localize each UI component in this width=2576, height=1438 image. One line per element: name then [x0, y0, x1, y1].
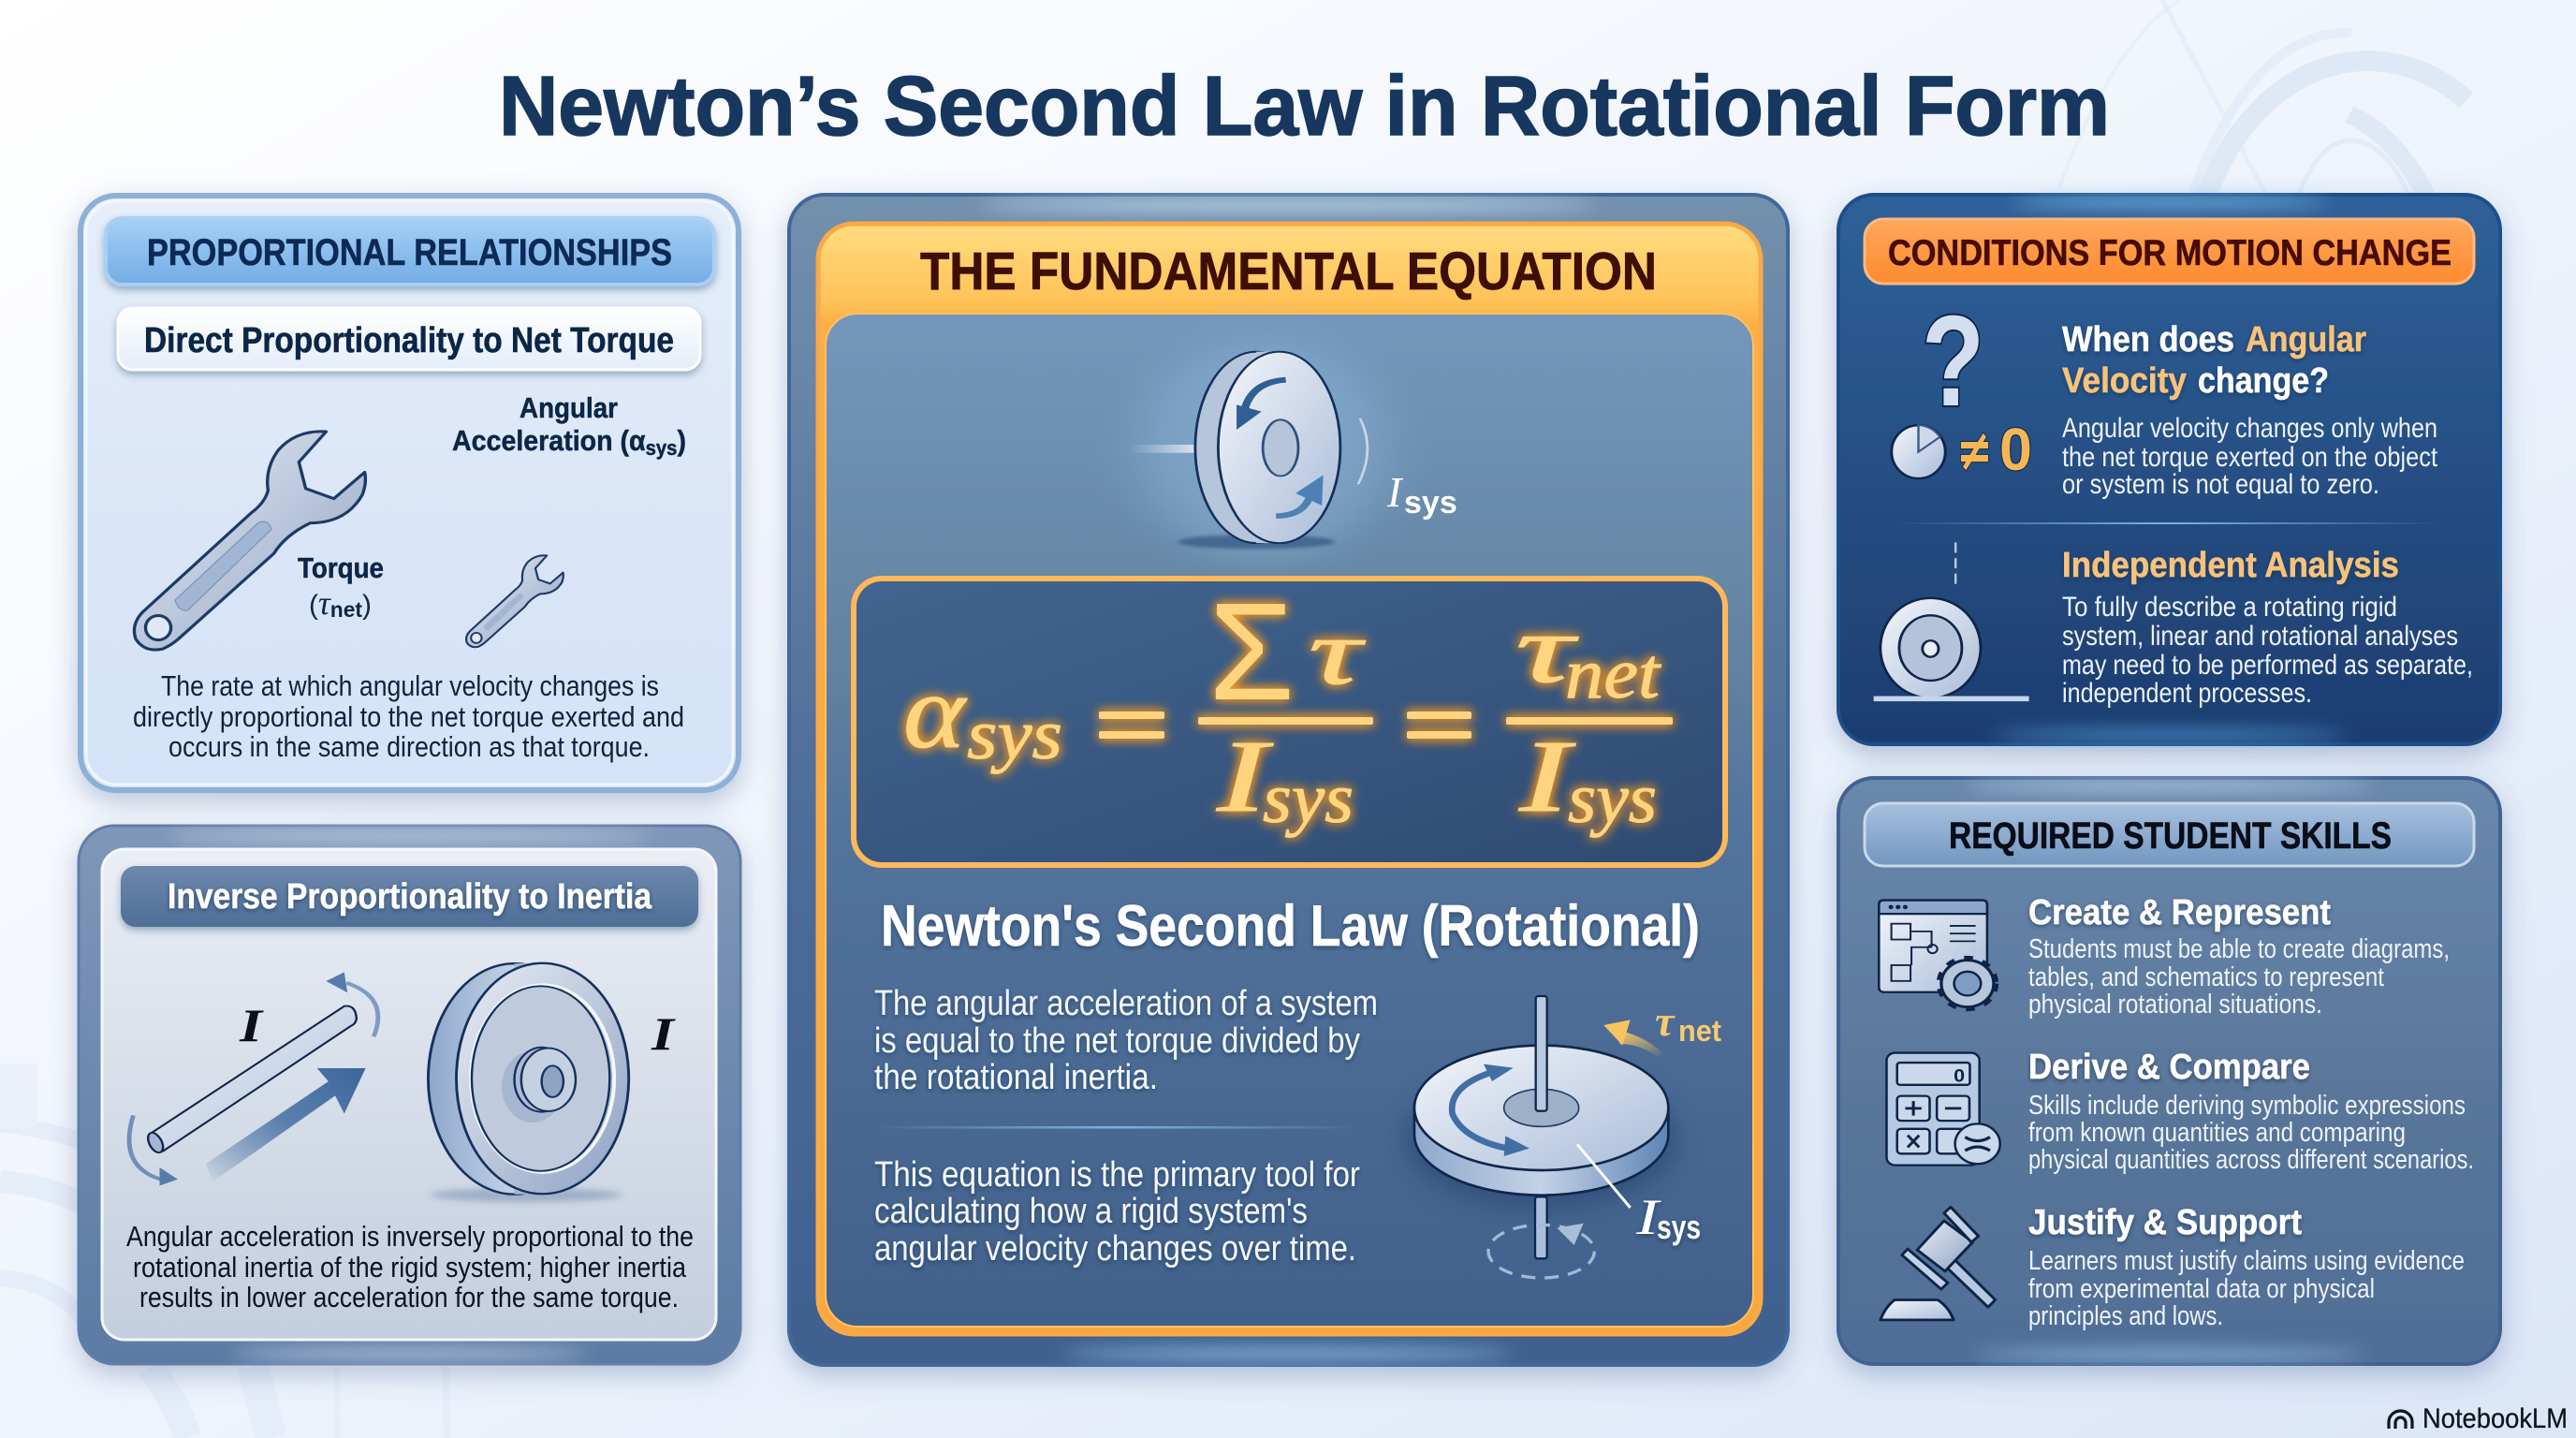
label: angular acceleration [452, 391, 686, 460]
text: justify and support: principles and lows. [2028, 1301, 2223, 1331]
text: definition: the rotational inertia. [874, 1058, 1158, 1097]
heading: when does angular velocity change: Angular [2246, 320, 2366, 360]
label: angular acceleration: Acceleration (α [452, 424, 662, 457]
heading: when does angular velocity change: When does [2062, 320, 2234, 360]
text: direct proportionality description: occurs in the same direction as that torque. [168, 730, 650, 763]
label: inertia of disc: I [651, 1007, 676, 1060]
text: definition: is equal to the net torque divided by [874, 1021, 1360, 1061]
icon: rod with rotation arrows [129, 972, 378, 1185]
text: application: calculating how a rigid system's [874, 1192, 1308, 1231]
text: justify and support [2028, 1246, 2465, 1331]
icon: spinning disc [1128, 341, 1387, 559]
label: angular acceleration: ) [677, 424, 686, 457]
panel: required student skills [1838, 778, 2500, 1364]
text: direct proportionality description: directly proportional to the net torque exerted and [133, 700, 684, 733]
label: angular acceleration: Angular [520, 391, 618, 424]
text: angular velocity condition: or system is not equal to zero. [2062, 469, 2379, 500]
text: inverse proportionality description: results in lower acceleration for the same torque. [139, 1281, 679, 1313]
formula: I [1216, 719, 1273, 833]
heading: independent analysis: Independent Analysis [2062, 546, 2399, 585]
label: tau net: τ [1655, 997, 1676, 1045]
label: torque [298, 551, 384, 622]
title: Newton’s Second Law in Rotational Form [499, 60, 2110, 154]
text: derive and compare [2028, 1091, 2474, 1175]
label: torque: ) [362, 590, 372, 621]
icon: net torque not equal zero [1892, 416, 2032, 484]
panel: proportional relationships [80, 196, 739, 790]
label: I sys: sys [1657, 1208, 1701, 1246]
formula [903, 575, 1673, 838]
text: angular velocity condition: the net torque exerted on the object [2062, 442, 2438, 473]
formula: τ [1309, 600, 1366, 704]
text: direct proportionality description: The rate at which angular velocity changes is [161, 669, 659, 702]
text: create and represent: Students must be able to create diagrams, [2028, 934, 2450, 964]
label: tau net: net [1678, 1014, 1721, 1048]
text: create and represent: physical rotational situations. [2028, 990, 2322, 1020]
icon: diagram window and gear [1879, 901, 1996, 1008]
heading: conditions [1865, 219, 2474, 284]
heading: inverse proportionality: Inverse Proportionality to Inertia [168, 877, 652, 917]
diagram: rotating disc on axle [1404, 996, 1678, 1278]
text: application: angular velocity changes over time. [874, 1229, 1356, 1269]
formula: Σ [1208, 575, 1295, 729]
text: derive and compare: Skills include deriving symbolic expressions [2028, 1091, 2466, 1121]
icon: question mark: ? [1922, 289, 1984, 433]
text: inverse proportionality description: rotational inertia of the rigid system; higher inertia [133, 1251, 687, 1284]
icon: net torque not equal zero: 0 [1999, 416, 2032, 483]
icon: rolling wheel [1874, 542, 2029, 701]
equation box [854, 575, 1725, 865]
label: inertia of rod: I [239, 999, 264, 1051]
label: I sys over disc: I [1386, 468, 1404, 516]
heading: proportional relationships [106, 218, 714, 285]
label: torque: net [330, 597, 362, 622]
heading: conditions: CONDITIONS FOR MOTION CHANGE [1888, 233, 2452, 273]
heading: create and represent: Create & Represent [2028, 893, 2331, 932]
text: derive and compare: physical quantities across different scenarios. [2028, 1145, 2474, 1175]
text: independent analysis: may need to be performed as separate, [2062, 650, 2473, 681]
icon: net torque not equal zero: ≠ [1956, 416, 1993, 484]
heading: when does angular velocity change: change? [2198, 361, 2329, 401]
icon: calculator: 0 [1954, 1067, 1965, 1086]
text: application: This equation is the primary tool for [874, 1155, 1360, 1195]
text: definition [874, 984, 1378, 1097]
formula: net [1565, 635, 1661, 713]
text: angular velocity condition: Angular velocity changes only when [2062, 413, 2437, 444]
heading: inverse proportionality [121, 866, 698, 927]
text: inverse proportionality description: Angular acceleration is inversely proportional to the [126, 1220, 694, 1253]
heading: newton's second law: Newton's Second Law (Rotational) [881, 894, 1700, 959]
label: I sys [1635, 1189, 1701, 1246]
formula: α [903, 654, 967, 770]
text: independent analysis [2062, 592, 2473, 709]
label: I sys over disc: sys [1404, 485, 1457, 521]
text: inverse proportionality description [126, 1220, 694, 1313]
heading: when does angular velocity change: Velocity [2062, 361, 2187, 401]
text: independent analysis: independent processes. [2062, 678, 2312, 709]
formula: τ [1515, 595, 1579, 703]
heading: when does angular velocity change [2062, 320, 2366, 401]
panel: conditions for motion change [1838, 195, 2500, 744]
formula: sys [1263, 759, 1354, 838]
text: direct proportionality description [133, 669, 684, 763]
subheading: direct proportionality [118, 308, 700, 370]
formula: I [1518, 719, 1575, 833]
text: application [874, 1155, 1360, 1269]
text: angular velocity condition [2062, 413, 2438, 500]
text: justify and support: from experimental data or physical [2028, 1274, 2375, 1304]
heading: the fundamental equation: THE FUNDAMENTAL EQUATION [920, 242, 1657, 301]
icon: gavel [1881, 1207, 1996, 1320]
heading: justify and support: Justify & Support [2028, 1203, 2302, 1242]
formula: sys [1568, 759, 1657, 838]
panel: the fundamental equation [789, 195, 1788, 1365]
icon: large wrench [134, 432, 365, 650]
text: create and represent [2028, 934, 2450, 1020]
label: torque: (τ [309, 584, 330, 622]
subheading: direct proportionality: Direct Proportionality to Net Torque [144, 321, 674, 360]
label: angular acceleration: sys [646, 436, 677, 460]
icon: calculator [1886, 1053, 2000, 1166]
label: I sys: I [1635, 1189, 1662, 1245]
text: derive and compare: from known quantities and comparing [2028, 1118, 2406, 1148]
panel: inverse proportionality [79, 826, 740, 1364]
heading: the fundamental equation [818, 224, 1761, 1334]
heading: proportional relationships: PROPORTIONAL RELATIONSHIPS [147, 232, 672, 273]
text: create and represent: tables, and schematics to represent [2028, 962, 2384, 992]
heading: required student skills [1865, 803, 2474, 866]
text: independent analysis: system, linear and rotational analyses [2062, 621, 2458, 652]
text: independent analysis: To fully describe a rotating rigid [2062, 592, 2397, 623]
label: torque: Torque [298, 551, 384, 584]
icon: thick disc [428, 962, 629, 1202]
icon: small wrench [466, 555, 564, 647]
heading: required student skills: REQUIRED STUDENT SKILLS [1949, 815, 2392, 857]
text: definition: The angular acceleration of a system [874, 984, 1378, 1023]
formula: sys [967, 696, 1062, 774]
text: justify and support: Learners must justify claims using evidence [2028, 1246, 2465, 1276]
label: tau net [1655, 997, 1721, 1048]
heading: derive and compare: Derive & Compare [2028, 1048, 2310, 1087]
